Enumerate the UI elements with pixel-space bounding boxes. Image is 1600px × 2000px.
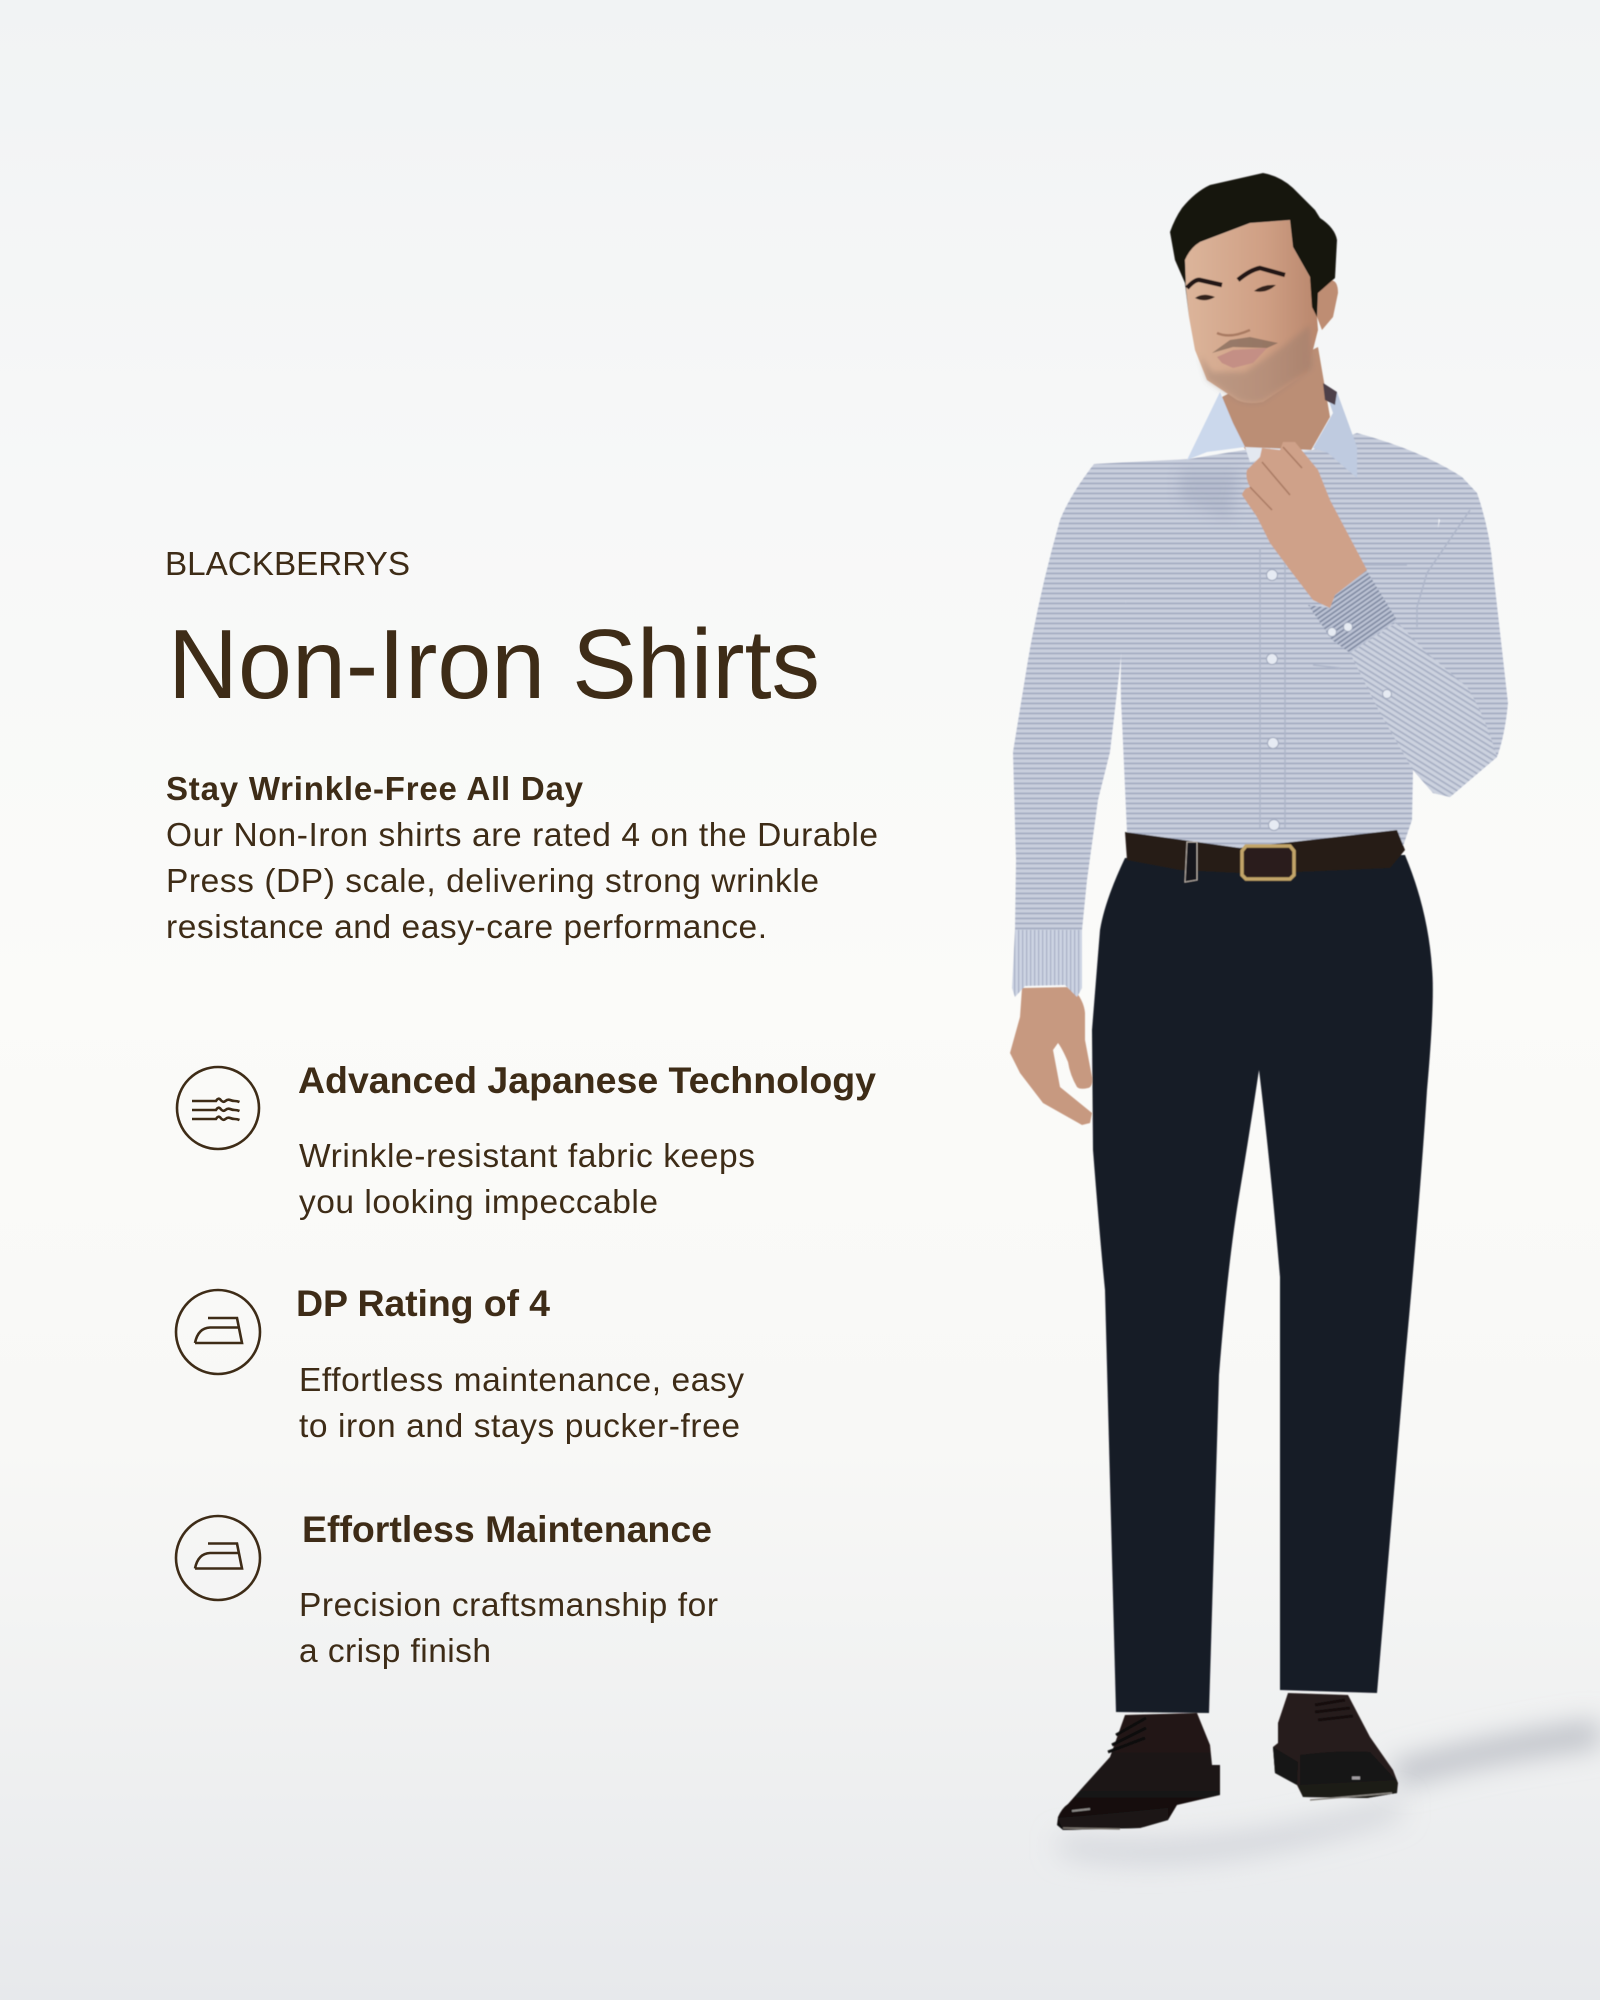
feature: dp rating xyxy=(176,1282,744,1445)
eyebrows xyxy=(1187,268,1285,288)
belt buckle xyxy=(1242,846,1294,879)
brand name: BLACKBERRYS xyxy=(165,545,410,582)
lips xyxy=(1217,348,1267,368)
feature text xyxy=(299,1138,755,1221)
feature heading: Advanced Japanese Technology xyxy=(298,1059,876,1101)
right upper sleeve xyxy=(1357,433,1508,797)
feature text: Effortless maintenance, easy xyxy=(299,1362,744,1399)
finger shading xyxy=(1250,447,1302,510)
shirt buttons xyxy=(1266,570,1392,830)
feature text: a crisp finish xyxy=(299,1633,491,1670)
icon: iron xyxy=(176,1290,260,1374)
hair xyxy=(1170,173,1337,317)
trousers xyxy=(1092,855,1433,1713)
belt keeper xyxy=(1185,842,1197,882)
placket, pocket and seams xyxy=(1260,510,1470,828)
right forearm xyxy=(1350,622,1497,797)
feature text xyxy=(299,1587,718,1670)
intro text: resistance and easy-care performance. xyxy=(166,909,767,946)
stubble xyxy=(1200,325,1312,403)
feature: advanced japanese technology xyxy=(177,1059,876,1221)
left sleeve xyxy=(1013,464,1140,930)
left cuff xyxy=(1012,930,1082,997)
raised hand xyxy=(1242,442,1367,608)
right cuff xyxy=(1308,568,1397,653)
face xyxy=(1185,220,1318,403)
feature text: Wrinkle-resistant fabric keeps xyxy=(299,1138,755,1175)
left shoe xyxy=(1057,1713,1220,1830)
collar xyxy=(1187,383,1357,478)
model photo illustration xyxy=(1010,173,1508,1830)
shirt torso xyxy=(1094,433,1440,855)
nose shadow xyxy=(1217,330,1250,335)
neck xyxy=(1222,347,1330,452)
intro text xyxy=(166,817,878,946)
left hand xyxy=(1010,987,1092,1125)
feature heading: DP Rating of 4 xyxy=(296,1282,550,1324)
feature text: to iron and stays pucker-free xyxy=(299,1408,740,1445)
ear xyxy=(1317,280,1338,330)
intro text: Press (DP) scale, delivering strong wrinkle xyxy=(166,863,819,900)
intro heading: Stay Wrinkle-Free All Day xyxy=(166,770,584,807)
icon: iron xyxy=(176,1516,260,1600)
shirt shading xyxy=(1180,470,1240,520)
belt xyxy=(1125,830,1405,873)
title: Non-Iron Shirts xyxy=(168,609,820,719)
feature: effortless maintenance xyxy=(176,1508,718,1670)
feature heading: Effortless Maintenance xyxy=(302,1508,712,1550)
intro block xyxy=(166,770,878,946)
moustache xyxy=(1212,337,1278,353)
feature text xyxy=(299,1362,744,1445)
eyes xyxy=(1195,285,1276,300)
intro text: Our Non-Iron shirts are rated 4 on the Durable xyxy=(166,817,878,854)
feature text: Precision craftsmanship for xyxy=(299,1587,718,1624)
icon: fabric waves xyxy=(177,1067,259,1149)
right shoe xyxy=(1273,1693,1398,1800)
feature text: you looking impeccable xyxy=(299,1184,658,1221)
